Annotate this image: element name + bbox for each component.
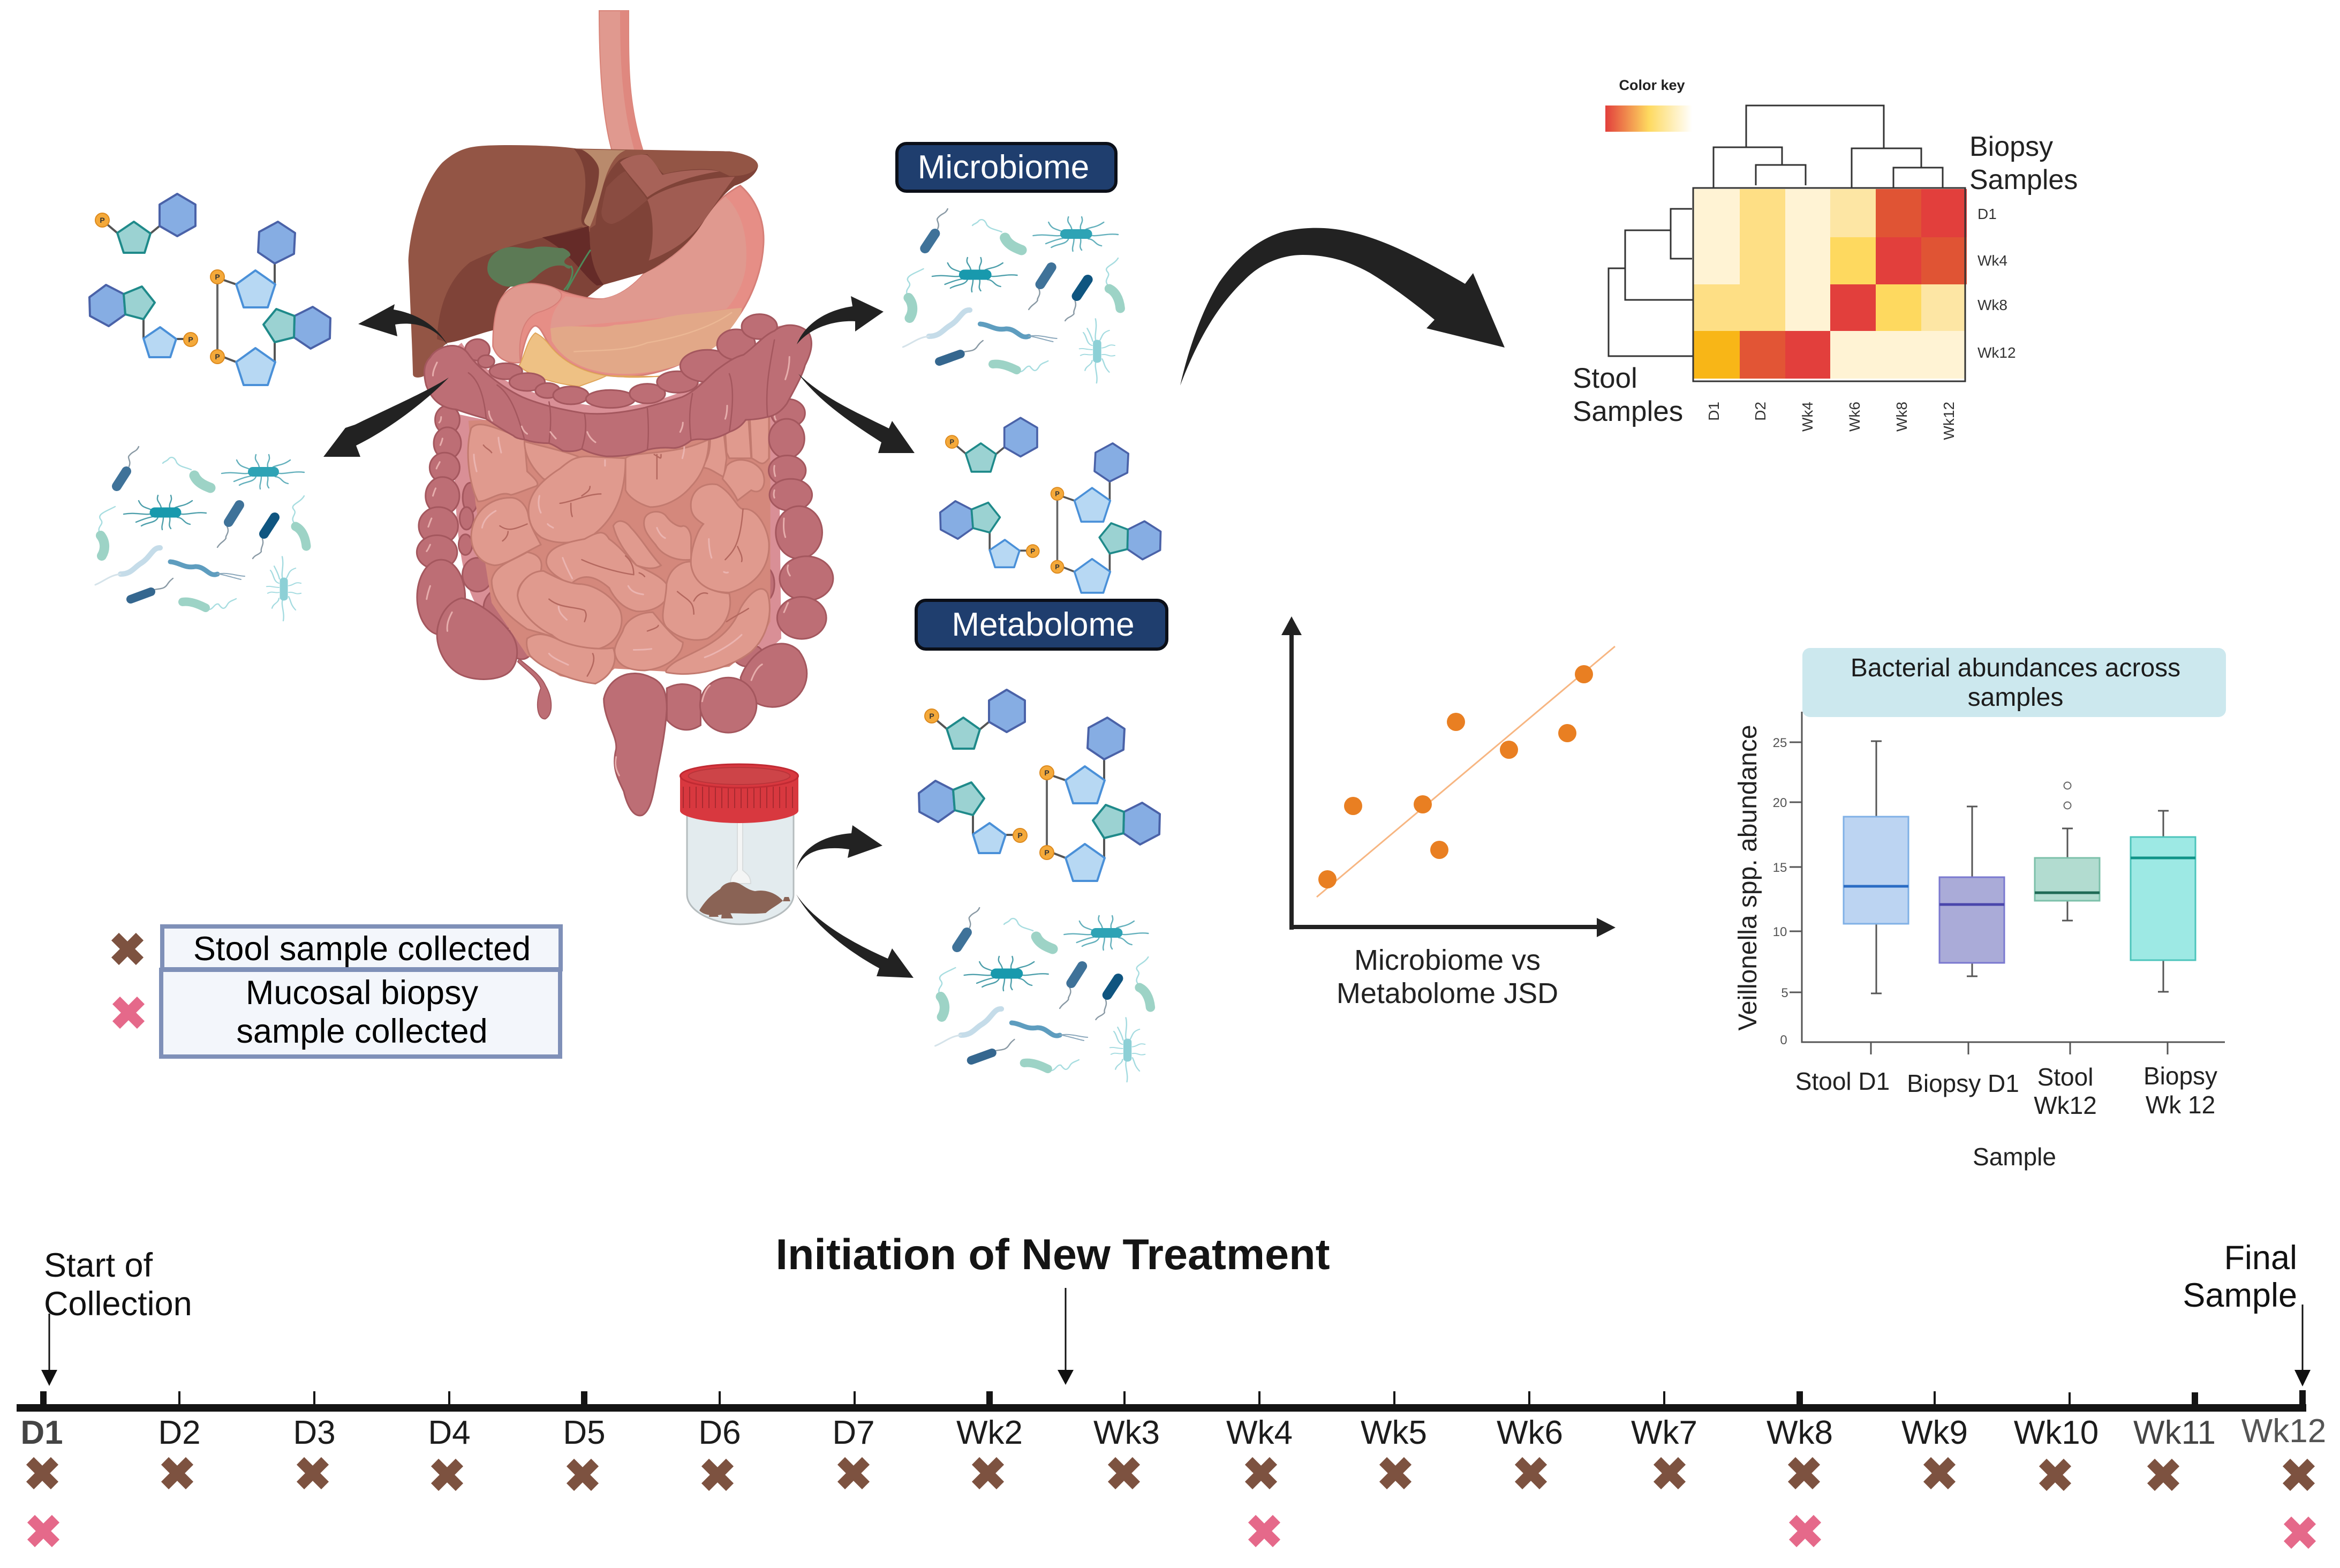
timeline labels: Wk5: [1361, 1414, 1427, 1451]
timeline labels: D2: [158, 1414, 201, 1451]
x axis title: [1337, 944, 1558, 1009]
arrow: jar to metabolome: [796, 825, 882, 870]
y tick labels: 5: [1781, 986, 1788, 1000]
metabolome label: [916, 600, 1167, 649]
y tick labels: 10: [1773, 925, 1787, 939]
x labels: Biopsy: [2143, 1062, 2217, 1090]
column labels: Wk6: [1846, 402, 1863, 432]
biopsy legend box: sample collected: [236, 1013, 488, 1050]
microbiome bacteria cluster: [903, 209, 1120, 383]
box: Stool Wk12: [2035, 782, 2100, 921]
chart title: [1802, 648, 2226, 717]
row labels: Wk4: [1977, 252, 2007, 269]
mesentery strips: [454, 404, 781, 659]
metabolome label: Metabolome: [952, 606, 1135, 643]
timeline labels: Wk2: [956, 1414, 1023, 1451]
appendix, rectum and sigmoid colon: [518, 644, 807, 816]
axes: [1281, 616, 1616, 937]
metabolome molecules lower: [919, 690, 1160, 881]
chart title: samples: [1968, 683, 2063, 712]
y axis title: Veillonella spp. abundance: [1734, 725, 1762, 1031]
row labels: [1977, 206, 2016, 361]
timeline labels: [20, 1413, 2326, 1451]
timeline labels: Wk10: [2014, 1414, 2099, 1451]
stool samples label: [1573, 363, 1683, 427]
x labels: Sample: [1973, 1143, 2056, 1171]
start of collection annotation: Start of: [44, 1247, 153, 1284]
left bacteria cluster: [95, 447, 306, 621]
arrow: colon to right metabolites: [798, 374, 915, 453]
biopsy samples label: [1969, 131, 2078, 195]
lower bacteria cluster: [935, 908, 1150, 1082]
appendix: [518, 659, 551, 719]
arrow: jar to microbes: [796, 894, 914, 978]
title: initiation of new treatment: Initiation of New Treatment: [775, 1231, 1330, 1279]
color key: Color key: [1619, 77, 1685, 93]
left dendrogram: [1609, 209, 1693, 356]
gallbladder: [487, 246, 591, 290]
metabolome molecules lower: P: [1044, 768, 1050, 777]
y tick labels: 20: [1773, 796, 1787, 810]
timeline labels: D6: [698, 1414, 741, 1451]
left metabolite molecules: P: [215, 352, 220, 361]
metabolome molecules lower: P: [1017, 831, 1023, 840]
chart title: Bacterial abundances across: [1851, 654, 2180, 682]
stomach: [493, 186, 764, 376]
esophagus: [599, 11, 643, 151]
timeline labels: D4: [428, 1414, 471, 1451]
new treatment arrow: [1058, 1288, 1074, 1385]
column labels: [1705, 402, 1957, 440]
timeline labels: Wk6: [1497, 1414, 1563, 1451]
icon: pink cross: [116, 1000, 141, 1025]
rear transverse colon: [440, 314, 789, 421]
row labels: Wk8: [1977, 297, 2007, 313]
arrow: large curved arrow to heatmap: [1180, 228, 1505, 386]
timeline labels: Wk9: [1901, 1414, 1968, 1451]
timeline labels: Wk3: [1093, 1414, 1160, 1451]
column labels: Wk8: [1893, 402, 1910, 432]
box: Stool D1: [1844, 741, 1908, 993]
metabolome molecules lower: P: [929, 712, 934, 720]
right metabolite molecules upper: P: [949, 438, 954, 446]
upper organs: [409, 145, 789, 421]
arrow: colon to microbiome: [797, 296, 884, 344]
treatment timeline: [17, 1231, 2326, 1545]
x labels: Stool D1: [1795, 1067, 1890, 1095]
left metabolite molecules: [89, 194, 330, 385]
x labels: Stool: [2037, 1063, 2093, 1091]
box: Biopsy D1: [1939, 806, 2004, 976]
heatmap cells: [1693, 188, 1967, 381]
rectum: [604, 674, 667, 816]
lower abdominal organs: [417, 325, 833, 684]
right metabolite molecules upper: P: [1055, 563, 1060, 571]
axes: [1790, 712, 2225, 1054]
start of collection annotation: [41, 1247, 192, 1386]
stool samples label: Samples: [1573, 396, 1683, 427]
box: Biopsy Wk 12: [2131, 811, 2195, 992]
left metabolite molecules: P: [100, 216, 105, 224]
x labels: Wk12: [2034, 1091, 2097, 1119]
descending colon: [769, 399, 833, 639]
legend: [115, 926, 561, 1057]
column labels: D2: [1752, 402, 1769, 421]
rear colon pockets: [458, 483, 774, 667]
column labels: D1: [1705, 402, 1722, 421]
liver: [409, 145, 758, 378]
start of collection annotation: Collection: [44, 1285, 192, 1323]
timeline labels: D1: [20, 1414, 63, 1451]
y tick labels: 15: [1773, 861, 1787, 875]
y tick labels: [1773, 736, 1788, 1047]
stool sample crosses: [30, 1461, 2311, 1487]
timeline labels: Wk8: [1767, 1414, 1833, 1451]
ascending colon: [417, 406, 517, 679]
timeline labels: Wk7: [1631, 1414, 1697, 1451]
final sample annotation: Final: [2224, 1239, 2297, 1277]
timeline labels: D7: [832, 1414, 875, 1451]
arrows from colon and jar: [323, 228, 1505, 978]
left metabolite molecules: P: [215, 273, 220, 281]
column labels: Wk12: [1941, 402, 1957, 440]
x labels: Wk 12: [2146, 1091, 2215, 1119]
trend line: [1317, 646, 1615, 897]
pancreas: [519, 333, 664, 387]
column labels: Wk4: [1799, 402, 1816, 432]
biopsy samples label: Biopsy: [1969, 131, 2053, 162]
timeline labels: Wk11: [2133, 1414, 2216, 1451]
y tick labels: 0: [1780, 1033, 1787, 1047]
biopsy legend box: [161, 970, 560, 1057]
data points: [1318, 665, 1593, 888]
top dendrogram: [1714, 105, 1943, 187]
right metabolite molecules upper: [940, 418, 1161, 593]
heatmap: [1573, 77, 2078, 440]
timeline labels: D3: [293, 1414, 336, 1451]
duodenum: [493, 283, 562, 363]
y tick labels: 25: [1773, 736, 1787, 750]
scatter plot: [1281, 616, 1616, 1009]
stool legend box: Stool sample collected: [193, 930, 531, 968]
color key: [1605, 77, 1692, 132]
pancreas seen through stomach: [550, 308, 742, 374]
microbiome label: Microbiome: [918, 149, 1089, 186]
sigmoid colon: [667, 644, 807, 733]
microbiome label: [897, 144, 1116, 191]
box plot: [1734, 648, 2226, 1171]
biopsy sample crosses: [31, 1519, 2312, 1545]
timeline labels: D5: [563, 1414, 606, 1451]
x axis title: Metabolome JSD: [1337, 977, 1558, 1009]
final sample annotation: [2183, 1239, 2311, 1386]
timeline axis and ticks: [17, 1390, 2306, 1412]
row labels: Wk12: [1977, 344, 2016, 361]
timeline labels: Wk12: [2241, 1413, 2326, 1450]
icon: brown cross: [115, 937, 140, 961]
x labels: Biopsy D1: [1907, 1069, 2019, 1097]
digestive system illustration: [409, 11, 833, 816]
left metabolite molecules: P: [188, 335, 193, 344]
biopsy legend box: Mucosal biopsy: [246, 974, 479, 1012]
final sample annotation: Sample: [2183, 1277, 2297, 1314]
timeline labels: Wk4: [1226, 1414, 1293, 1451]
right metabolite molecules upper: P: [1030, 547, 1035, 555]
biopsy samples label: Samples: [1969, 164, 2078, 195]
icon: specimen jar: [680, 764, 798, 924]
arrow: colon to left microbes: [323, 378, 449, 457]
row labels: D1: [1977, 206, 1997, 222]
x axis title: Microbiome vs: [1354, 944, 1541, 976]
metabolome molecules lower: P: [1044, 848, 1050, 857]
right metabolite molecules upper: P: [1055, 490, 1060, 498]
front transverse colon: [425, 325, 811, 456]
x labels: [1795, 1062, 2217, 1171]
stool samples label: Stool: [1573, 363, 1637, 394]
small intestine: [468, 408, 771, 684]
arrow: colon to left metabolites: [358, 304, 449, 347]
